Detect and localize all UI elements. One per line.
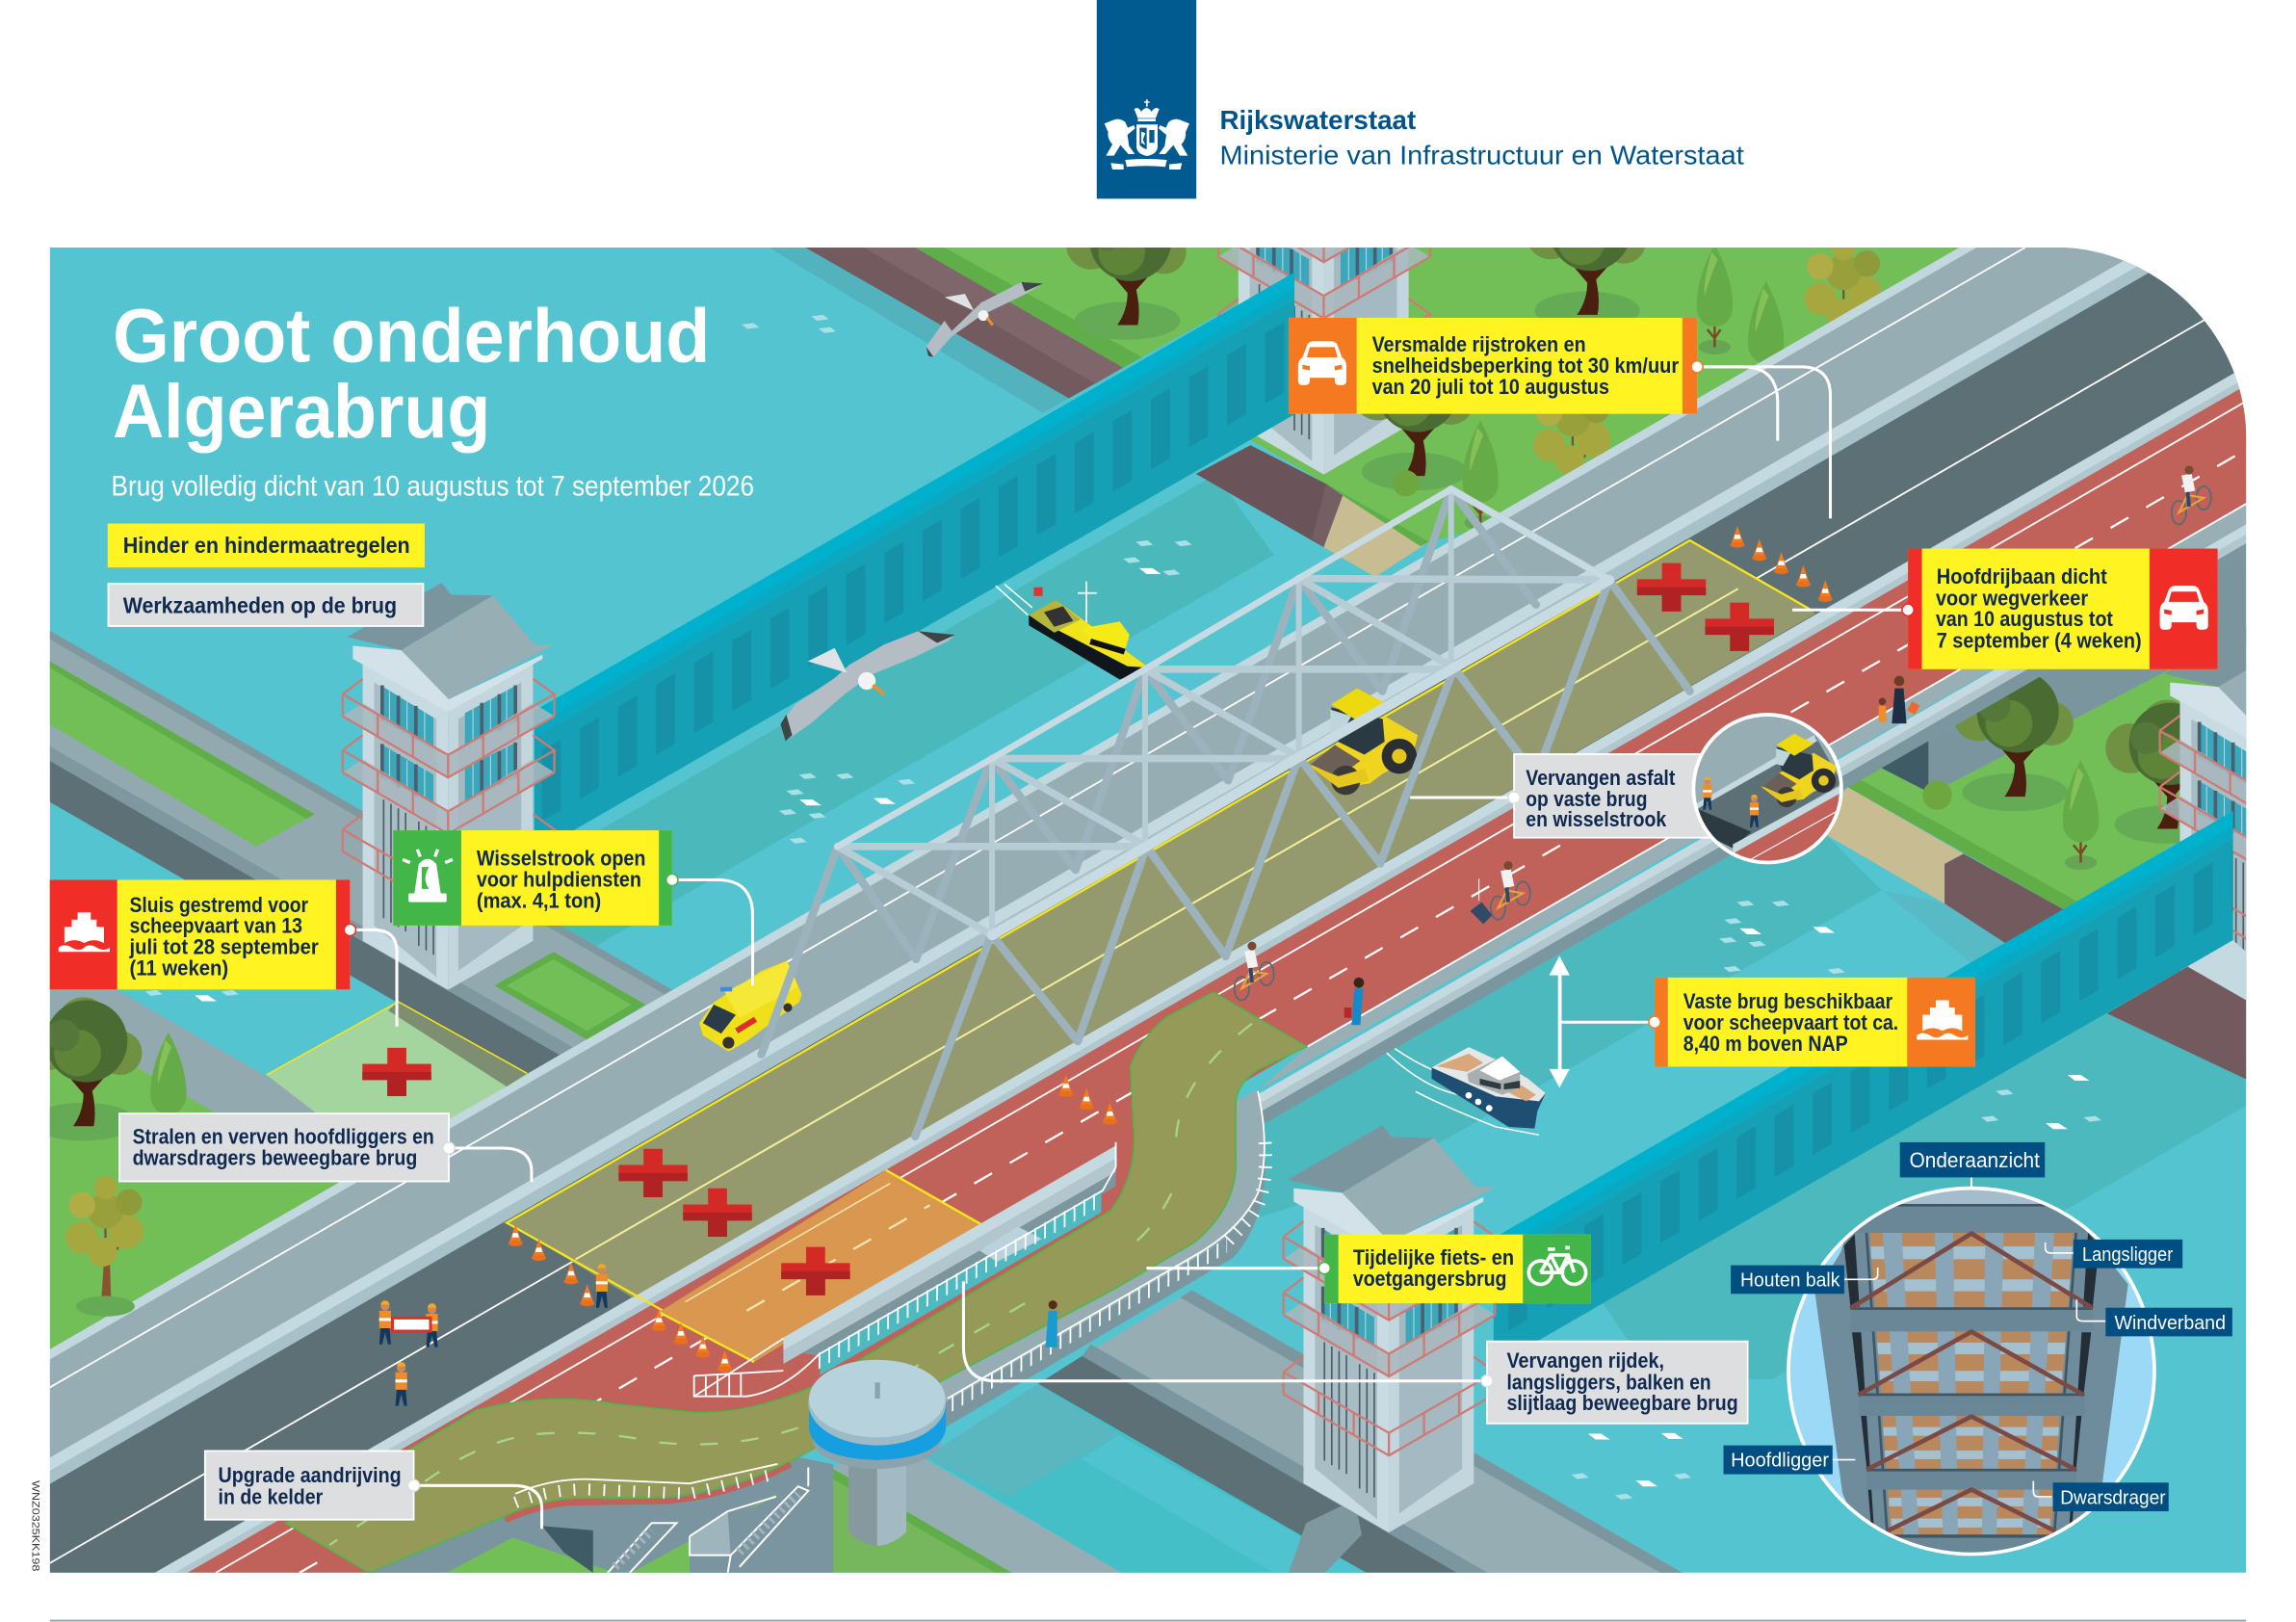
- right land: [1826, 558, 2246, 945]
- legend: werkzaamheden: [109, 584, 423, 626]
- callout: vaste brug: Vaste brug beschikbaar: [1683, 989, 1892, 1013]
- orange movable section: [659, 1170, 981, 1362]
- callout: hoofdrijbaan dicht: Hoofdrijbaan dicht: [1937, 564, 2107, 589]
- footer rule: [50, 1620, 2246, 1622]
- upper left quays and canal banks: [50, 248, 1959, 1349]
- callout: wisselstrook: voor hulpdiensten: [477, 867, 641, 891]
- quay wall and sand: [1196, 445, 1429, 577]
- main road bands: [50, 248, 2246, 1573]
- right tower: [2158, 626, 2246, 1007]
- road workers and barrier: [379, 1264, 608, 1406]
- callout: vaste brug: [1649, 978, 1975, 1066]
- road roller: [1308, 689, 1418, 795]
- callout: vervangen asfalt: [1508, 754, 1711, 838]
- left tower: [343, 583, 555, 990]
- callout: hoofdrijbaan dicht: 7 september (4 weken): [1937, 629, 2142, 653]
- callout: vervangen rijdek: slijtlaag beweegbare brug: [1506, 1391, 1738, 1415]
- upper wall of canal: [535, 273, 1294, 852]
- callout: versmalde rijstroken: van 20 juli tot 10 augustus: [1372, 375, 1609, 399]
- callout: wisselstrook: [393, 830, 678, 926]
- callout: wisselstrook: Wisselstrook open: [477, 847, 646, 871]
- light green lock repair area: [266, 1001, 528, 1119]
- callout: vaste brug: voor scheepvaart tot ca.: [1683, 1010, 1898, 1034]
- subtitle: Brug volledig dicht van 10 augustus tot 7 september 2026: [112, 471, 754, 503]
- callout: vervangen asfalt: Vervangen asfalt: [1526, 766, 1676, 790]
- callout: sluis gestremd: scheepvaart van 13: [130, 913, 302, 937]
- seagull upper: [926, 282, 1043, 357]
- icon: siren: [403, 850, 453, 903]
- callout: vaste brug: 8,40 m boven NAP: [1683, 1032, 1848, 1056]
- callout: sluis gestremd: Sluis gestremd voor: [130, 893, 308, 917]
- callout: wisselstrook: (max. 4,1 ton): [477, 889, 601, 913]
- header logo block: [1097, 0, 1196, 198]
- callout: versmalde rijstroken: [1289, 318, 1703, 414]
- top tower: [1217, 248, 1432, 474]
- label: windverband: Windverband: [2114, 1312, 2226, 1334]
- callout: vervangen rijdek: langsliggers, balken en: [1506, 1370, 1711, 1394]
- callout: sluis gestremd: juli tot 28 september: [129, 935, 319, 959]
- title: [113, 293, 710, 454]
- label: langsligger: Langsligger: [2082, 1243, 2173, 1266]
- callout: vervangen asfalt: op vaste brug: [1526, 787, 1647, 811]
- white connector lines: [350, 367, 1908, 1529]
- seagull lower: [780, 631, 955, 741]
- callout: hoofdrijbaan dicht: van 10 augustus tot: [1936, 607, 2114, 631]
- callout: stralen en verven: dwarsdragers beweegbare brug: [133, 1145, 417, 1169]
- trees behind bridge: [1066, 248, 1882, 370]
- callout: sluis gestremd: (11 weken): [130, 956, 228, 981]
- callout: tijdelijke fietsbrug: voetgangersbrug: [1353, 1267, 1506, 1291]
- label: dwarsdrager: Dwarsdrager: [2060, 1486, 2166, 1508]
- label: onderaanzicht: [1900, 1142, 2045, 1177]
- water ripples: [145, 315, 2101, 1500]
- callout: upgrade aandrijving: in de kelder: [219, 1484, 324, 1508]
- ambulance: [699, 960, 801, 1052]
- title: Groot onderhoud: [113, 293, 710, 379]
- callout: tijdelijke fietsbrug: [1318, 1235, 1591, 1303]
- label: hoofdligger: Hoofdligger: [1731, 1450, 1829, 1472]
- crosses: work locations: [362, 563, 1774, 1295]
- callout: sluis gestremd: [50, 879, 355, 989]
- lower left trees: [50, 997, 187, 1317]
- callout: stralen en verven: [119, 1113, 455, 1182]
- callout: vervangen rijdek: Vervangen rijdek,: [1506, 1348, 1664, 1373]
- boat: white motor boat: [1387, 1047, 1546, 1135]
- organisation name: [1219, 105, 1744, 170]
- callout: stralen en verven: Stralen en verven hoofdliggers en: [133, 1124, 434, 1148]
- curb and fence of movable bridge: [694, 1142, 1116, 1397]
- water shade upper canal: [498, 475, 1274, 946]
- callout: upgrade aandrijving: Upgrade aandrijving: [219, 1463, 402, 1487]
- callout: vervangen asfalt: en wisselstrook: [1526, 807, 1667, 831]
- bottom tower: [1284, 1125, 1496, 1532]
- trees in front of top tower: [1361, 414, 1610, 530]
- label: onderaanzicht: Onderaanzicht: [1910, 1148, 2040, 1172]
- organisation name: Rijkswaterstaat: [1219, 105, 1417, 135]
- illustration panel: bridge scene: [50, 248, 2246, 1573]
- truss bridge: [762, 489, 1690, 1137]
- document code: WNZ0325KK198: [29, 1480, 40, 1571]
- title: Algerabrug: [113, 368, 490, 454]
- arrow: clearance height: [1550, 955, 1570, 1087]
- callout: versmalde rijstroken: snelheidsbeperking tot 30 km/uur: [1372, 353, 1680, 378]
- lower quay: [833, 1290, 1683, 1573]
- organisation name: Ministerie van Infrastructuur en Waterstaat: [1219, 140, 1744, 170]
- bottom view circle: [1788, 1175, 2154, 1557]
- legend: hinder: Hinder en hindermaatregelen: [123, 533, 410, 558]
- callout: hoofdrijbaan dicht: voor wegverkeer: [1936, 587, 2088, 611]
- lower right wall: [1494, 811, 2246, 1367]
- icon: national coat of arms: [1105, 99, 1189, 170]
- boat: yellow pilot vessel: [996, 582, 1150, 679]
- lower water shades: [1252, 800, 2246, 1379]
- control tower: [808, 1360, 946, 1546]
- closed roadway overlay: [507, 540, 1815, 1362]
- callout: tijdelijke fietsbrug: Tijdelijke fiets- en: [1353, 1245, 1514, 1269]
- railings of bike bridge: [515, 1091, 1265, 1573]
- ground under bike bridge: [366, 1457, 833, 1573]
- temporary bike and pedestrian bridge: [285, 992, 1307, 1573]
- callout: hoofdrijbaan dicht: [1902, 549, 2218, 669]
- callout: vervangen rijdek: [1481, 1342, 1748, 1424]
- traffic cones: [509, 526, 1833, 1373]
- cyclists and pedestrians: [1046, 465, 2211, 1347]
- inset circle: asphalt detail: [1693, 715, 1842, 864]
- legend: hinder: [108, 524, 425, 567]
- callout: upgrade aandrijving: [205, 1451, 420, 1520]
- label: houten balk: Houten balk: [1740, 1269, 1840, 1292]
- callout: versmalde rijstroken: Versmalde rijstroken en: [1372, 332, 1586, 356]
- legend: werkzaamheden: Werkzaamheden op de brug: [123, 592, 397, 617]
